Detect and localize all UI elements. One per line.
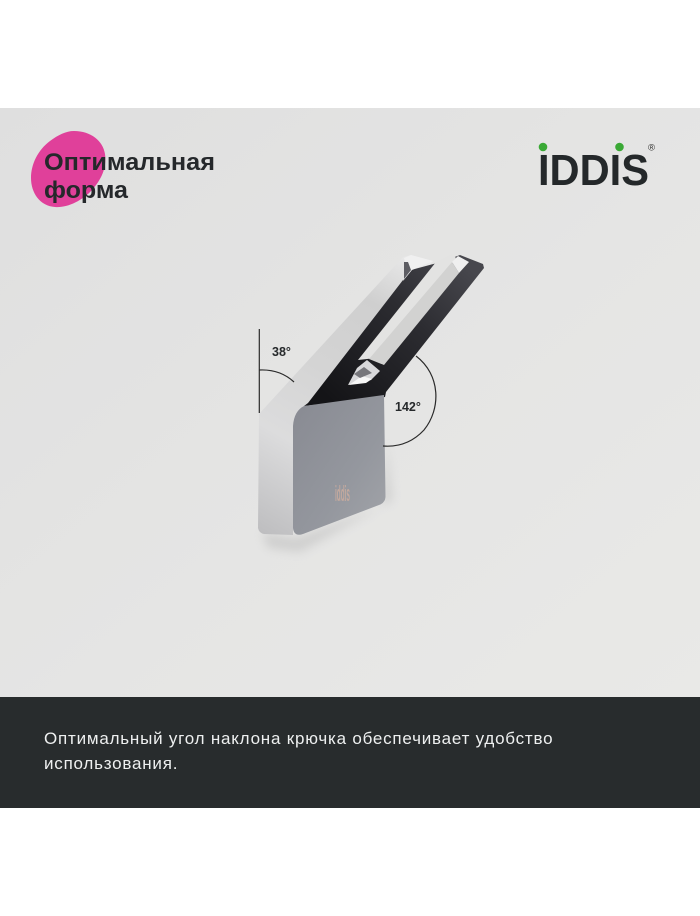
caption text: Оптимальный угол наклона крючка обеспечивает удобство использования. <box>44 729 553 773</box>
second prong tip highlight <box>452 256 469 273</box>
dark prong silhouette <box>304 255 484 406</box>
title badge: форма <box>44 177 128 204</box>
IDDIS logo: IDDIS <box>538 146 649 195</box>
hook product: iddis <box>335 481 350 506</box>
back plate and light arm <box>258 255 433 535</box>
product photo scene <box>0 108 700 697</box>
IDDIS logo: ® <box>648 142 655 154</box>
pink blob <box>31 131 105 207</box>
label: 38 degrees: 38° <box>272 345 291 359</box>
caption band <box>0 697 700 808</box>
second prong light face <box>369 262 459 365</box>
wall background <box>0 108 700 697</box>
hook product <box>258 254 484 552</box>
title badge <box>31 131 215 207</box>
first prong tip highlight <box>403 255 433 281</box>
38 degree angle lines <box>258 329 260 413</box>
angle annotations <box>259 329 436 446</box>
title text: Оптимальная <box>44 149 215 176</box>
label: 142 degrees: 142° <box>395 400 421 414</box>
wall shadow <box>262 440 392 552</box>
prong base highlight <box>348 360 380 385</box>
front plate <box>293 395 386 535</box>
gap between prongs <box>358 254 456 360</box>
142 degree arc <box>383 356 436 446</box>
